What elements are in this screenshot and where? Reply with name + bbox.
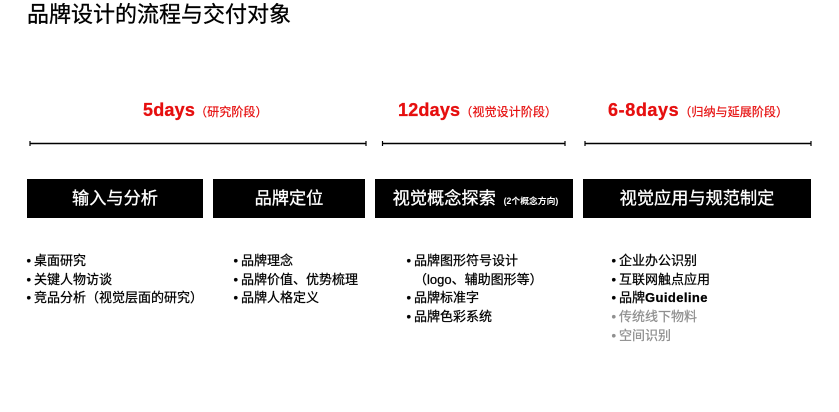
list: research items: • bbox=[26, 253, 31, 268]
step: input and analysis bbox=[27, 179, 203, 218]
list: research items: 桌面研究 bbox=[34, 253, 86, 268]
step: visual application and guidelines: 视觉应用与规范制定 bbox=[620, 188, 774, 208]
list: research items: • bbox=[26, 272, 31, 287]
step: visual application and guidelines bbox=[583, 179, 811, 218]
list: application items: • bbox=[612, 290, 616, 305]
list: application items: • bbox=[612, 272, 616, 287]
step: brand positioning: 品牌定位 bbox=[255, 188, 323, 208]
list: brand positioning items bbox=[234, 253, 358, 305]
list: visual concept items: 品牌图形符号设计 bbox=[414, 253, 518, 268]
list: visual concept items: （logo、辅助图形等） bbox=[414, 272, 543, 287]
list: visual concept items: • bbox=[406, 290, 411, 305]
phase label: 6-8days: 6-8days（归纳与延展阶段） bbox=[608, 100, 788, 120]
list: visual concept items: • bbox=[406, 253, 411, 268]
phase label: 5days: 5days（研究阶段） bbox=[143, 100, 268, 120]
step: brand positioning bbox=[213, 179, 365, 218]
list: visual concept items: 品牌色彩系统 bbox=[414, 309, 492, 324]
list: research items bbox=[26, 253, 203, 305]
list: application items: • bbox=[612, 328, 616, 343]
list: brand positioning items: 品牌价值、优势梳理 bbox=[241, 272, 358, 287]
list: brand positioning items: • bbox=[234, 290, 238, 305]
title: 品牌设计的流程与交付对象 bbox=[27, 2, 291, 27]
step: visual concept exploration bbox=[375, 179, 573, 218]
list: application items: 互联网触点应用 bbox=[619, 272, 710, 287]
list: brand positioning items: 品牌理念 bbox=[241, 253, 293, 268]
list: brand positioning items: 品牌人格定义 bbox=[241, 290, 319, 305]
list: visual concept items: • bbox=[406, 309, 411, 324]
list: application items: 传统线下物料 bbox=[619, 309, 697, 324]
list: research items: 竞品分析（视觉层面的研究） bbox=[34, 290, 203, 305]
list: application items: • bbox=[612, 253, 616, 268]
list: visual concept items: 品牌标准字 bbox=[414, 290, 479, 305]
list: application items bbox=[612, 253, 710, 343]
phase label: 12days: 12days（视觉设计阶段） bbox=[398, 100, 557, 120]
list: application items: 品牌Guideline bbox=[619, 290, 708, 305]
step: input and analysis: 输入与分析 bbox=[72, 188, 158, 208]
step: visual concept exploration: 视觉概念探索 (2个概念方向) bbox=[393, 188, 558, 208]
list: application items: 空间识别 bbox=[619, 328, 671, 343]
list: brand positioning items: • bbox=[234, 253, 238, 268]
list: research items: • bbox=[26, 290, 31, 305]
list: application items: 企业办公识别 bbox=[619, 253, 697, 268]
list: brand positioning items: • bbox=[234, 272, 238, 287]
list: application items: • bbox=[612, 309, 616, 324]
list: visual concept items bbox=[406, 253, 543, 324]
list: research items: 关键人物访谈 bbox=[34, 272, 112, 287]
